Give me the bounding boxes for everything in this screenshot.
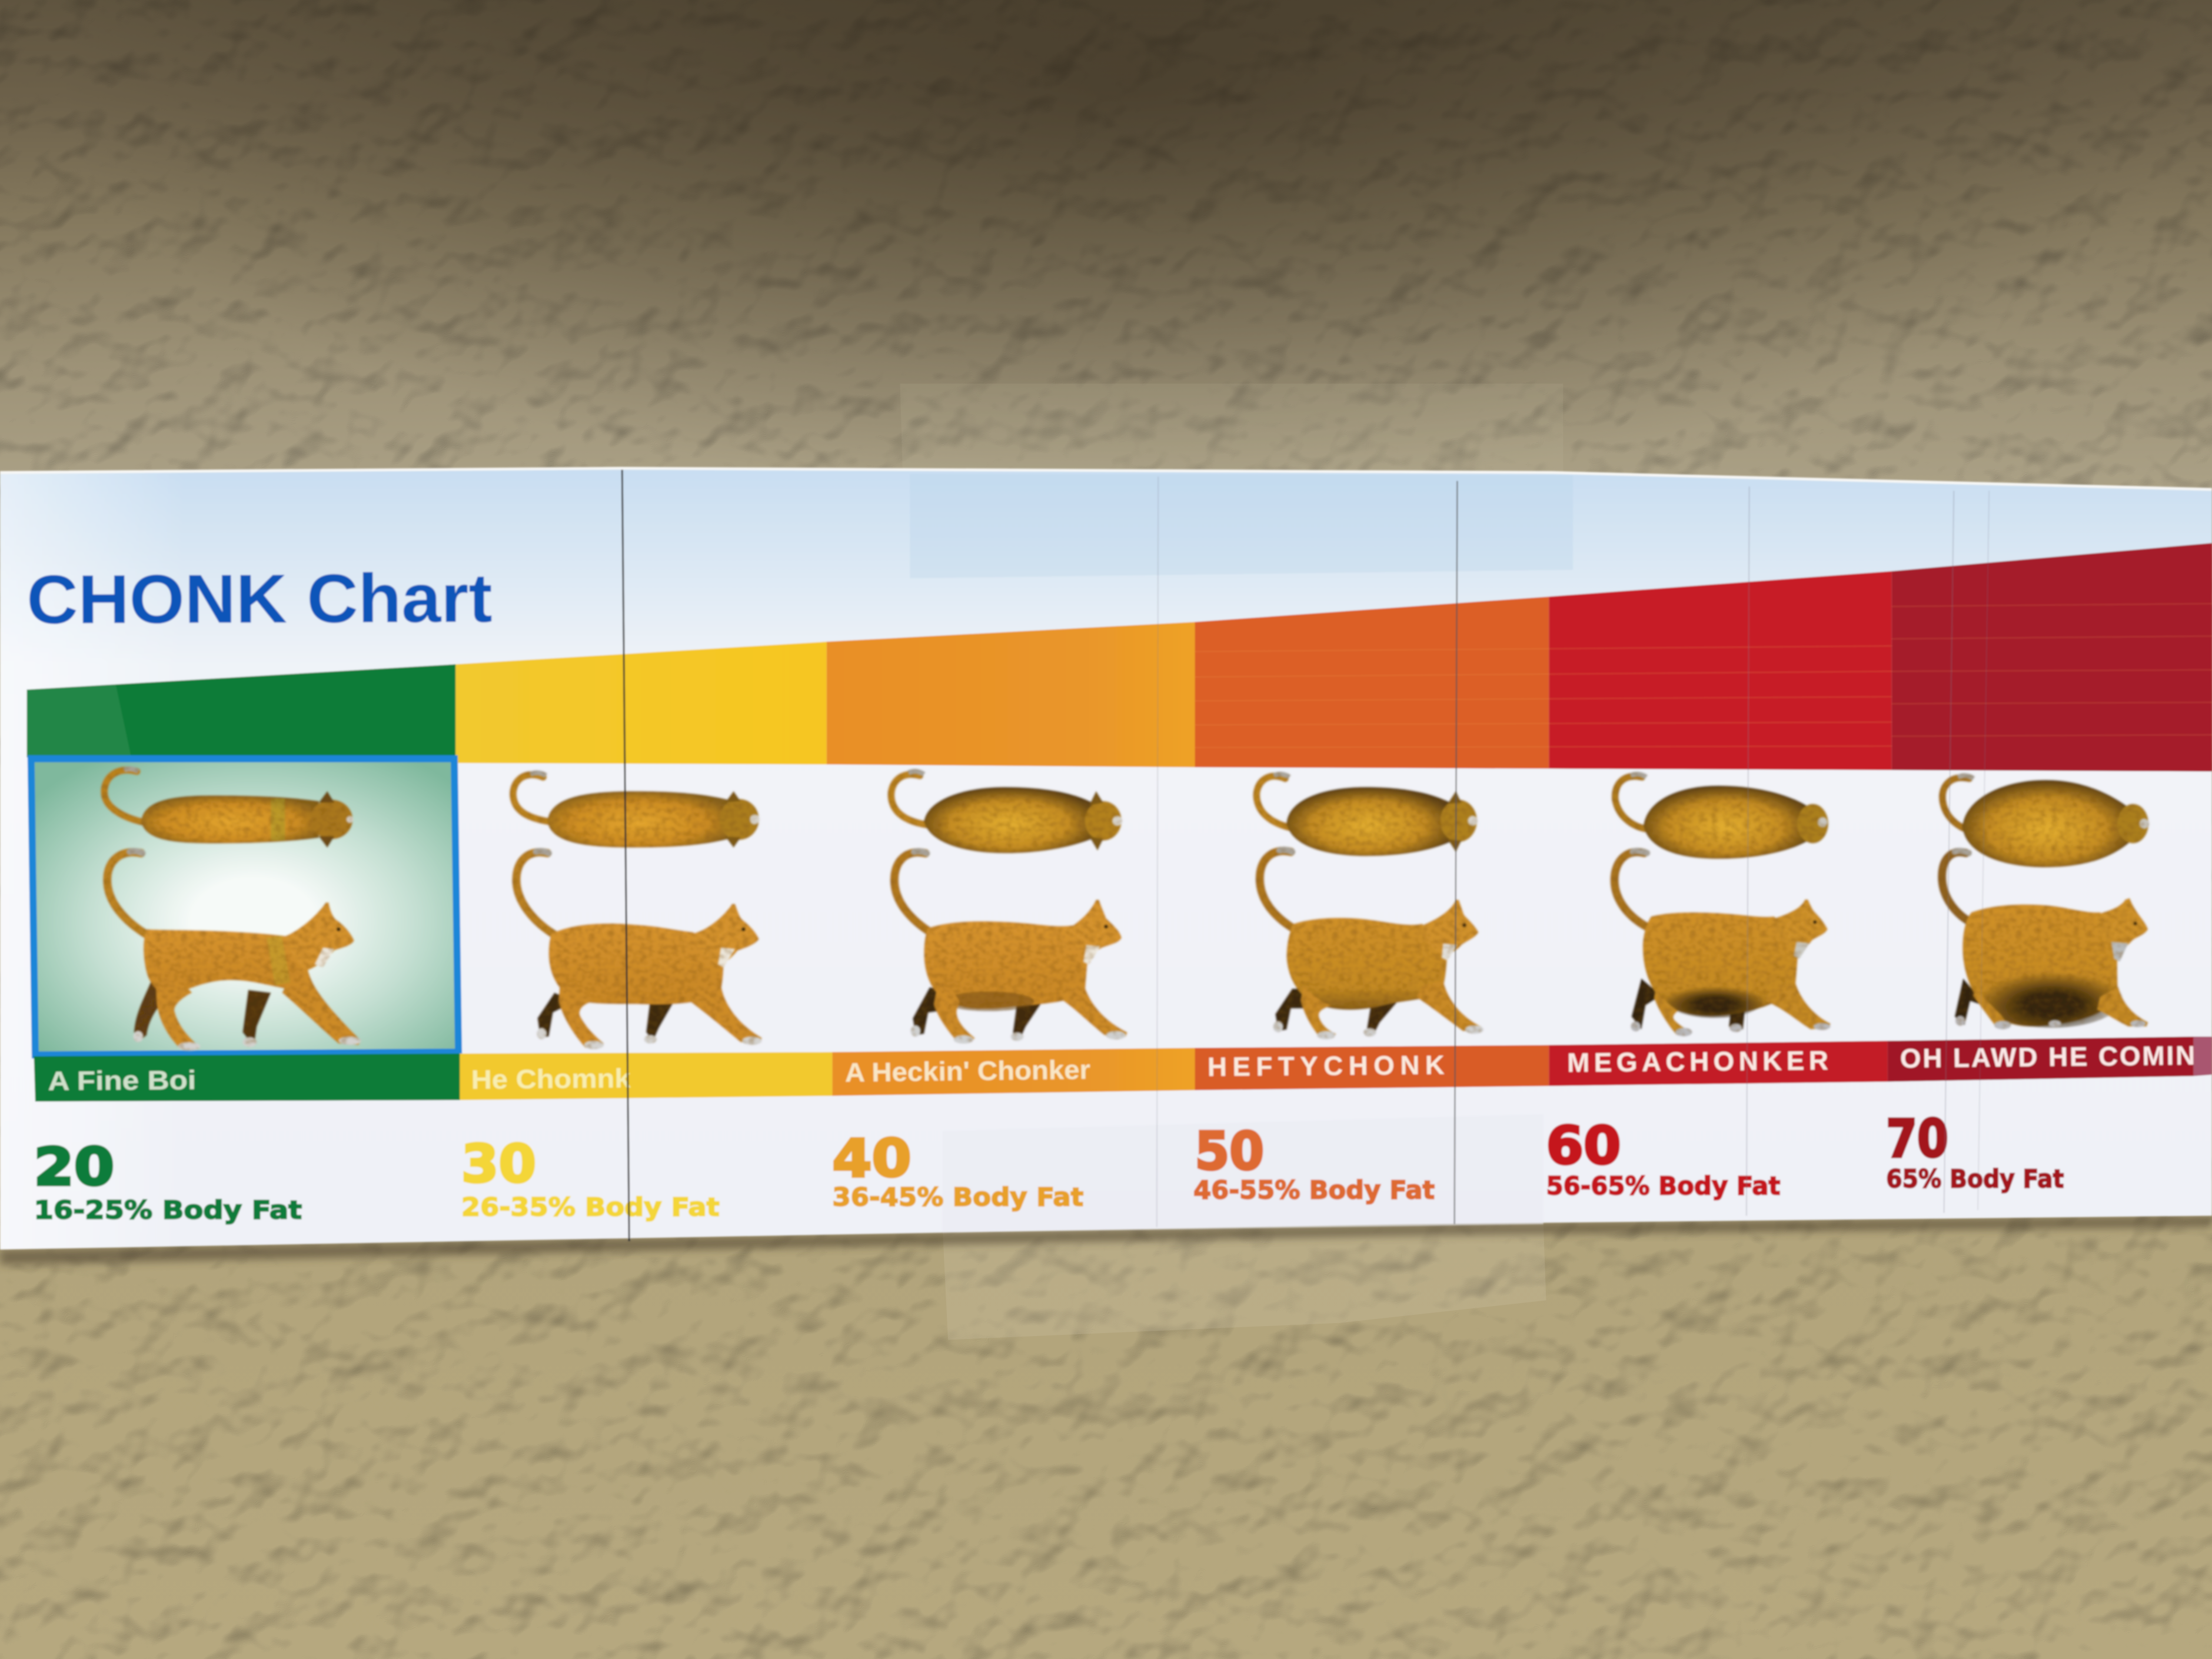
label bar: A Heckin' Chonker xyxy=(832,1048,1195,1096)
stat: 70: 65% Body Fat xyxy=(1886,1165,2064,1194)
stat: 50 xyxy=(1193,1121,1435,1205)
cat 4 top view xyxy=(1256,774,1478,856)
cat 1 side view xyxy=(107,851,361,1051)
title: CHONK Chart xyxy=(26,559,493,638)
label bar: He Chomnk: He Chomnk xyxy=(471,1063,631,1095)
stat: 20 xyxy=(34,1137,302,1225)
tape below strip xyxy=(942,1221,1546,1340)
label bar: HEFTYCHONK: HEFTYCHONK xyxy=(1208,1050,1445,1082)
segment: orange xyxy=(827,622,1195,767)
stat: 40: 40 xyxy=(832,1128,912,1188)
stat: 70: 70 xyxy=(1886,1108,1948,1169)
label bar: OH LAWD HE COMIN xyxy=(1888,1037,2212,1082)
label bar: A Heckin' Chonker: A Heckin' Chonker xyxy=(844,1055,1091,1088)
cat 2 side view xyxy=(516,851,762,1049)
highlighted panel: A Fine Boi xyxy=(31,759,458,1055)
stat: 60 xyxy=(1546,1115,1780,1201)
sheet seam lines xyxy=(622,469,1989,1241)
stat: 40: 36-45% Body Fat xyxy=(832,1183,1083,1212)
cat 5 top view xyxy=(1615,774,1828,859)
cat 4 side view xyxy=(1260,850,1483,1040)
label bar: A Fine Boi xyxy=(34,1054,460,1101)
cat 6 side view xyxy=(1942,851,2148,1030)
stat: 40 xyxy=(832,1128,1083,1212)
label bar: A Fine Boi: A Fine Boi xyxy=(48,1065,196,1096)
segment: dark red xyxy=(1892,543,2212,771)
stats row xyxy=(34,1108,2064,1225)
label bar: MEGACHONKER xyxy=(1549,1041,1888,1086)
cat 6 top view xyxy=(1942,775,2149,867)
stat: 30 xyxy=(461,1134,720,1222)
stat: 50: 46-55% Body Fat xyxy=(1193,1176,1435,1205)
label bar: HEFTYCHONK xyxy=(1195,1045,1549,1090)
segment: red xyxy=(1549,571,1892,770)
strip shadow xyxy=(0,1216,2212,1265)
stat: 30: 30 xyxy=(461,1134,536,1194)
cat 1 top view xyxy=(104,769,354,848)
paper strip xyxy=(0,468,2212,1250)
cat 5 side view xyxy=(1615,851,1831,1037)
label bar: MEGACHONKER: MEGACHONKER xyxy=(1567,1045,1828,1078)
stat: 30: 26-35% Body Fat xyxy=(461,1193,720,1222)
cat 3 top view xyxy=(891,771,1122,853)
segment: dark orange xyxy=(1195,597,1549,769)
label bars xyxy=(34,1037,2212,1101)
stat: 50: 50 xyxy=(1195,1121,1264,1181)
top edge highlight xyxy=(0,468,2212,489)
segment: green xyxy=(27,664,455,757)
stat: 20: 20 xyxy=(34,1137,114,1197)
cat 3 side view xyxy=(894,851,1127,1044)
stat: 20: 16-25% Body Fat xyxy=(34,1195,302,1225)
paper sheet xyxy=(0,468,2212,1250)
label bar: OH LAWD HE COMIN: OH LAWD HE COMIN xyxy=(1900,1041,2195,1074)
cat 2 top view xyxy=(513,773,760,848)
segment: yellow xyxy=(455,642,827,764)
print banding lines xyxy=(1195,604,2212,748)
tape above strip xyxy=(900,384,1563,479)
stat: 70 xyxy=(1886,1108,2064,1194)
stat: 60: 56-65% Body Fat xyxy=(1546,1172,1780,1201)
label bar: He Chomnk xyxy=(460,1052,832,1100)
graduated wedge bar xyxy=(27,543,2212,771)
stat: 60: 60 xyxy=(1546,1115,1621,1176)
